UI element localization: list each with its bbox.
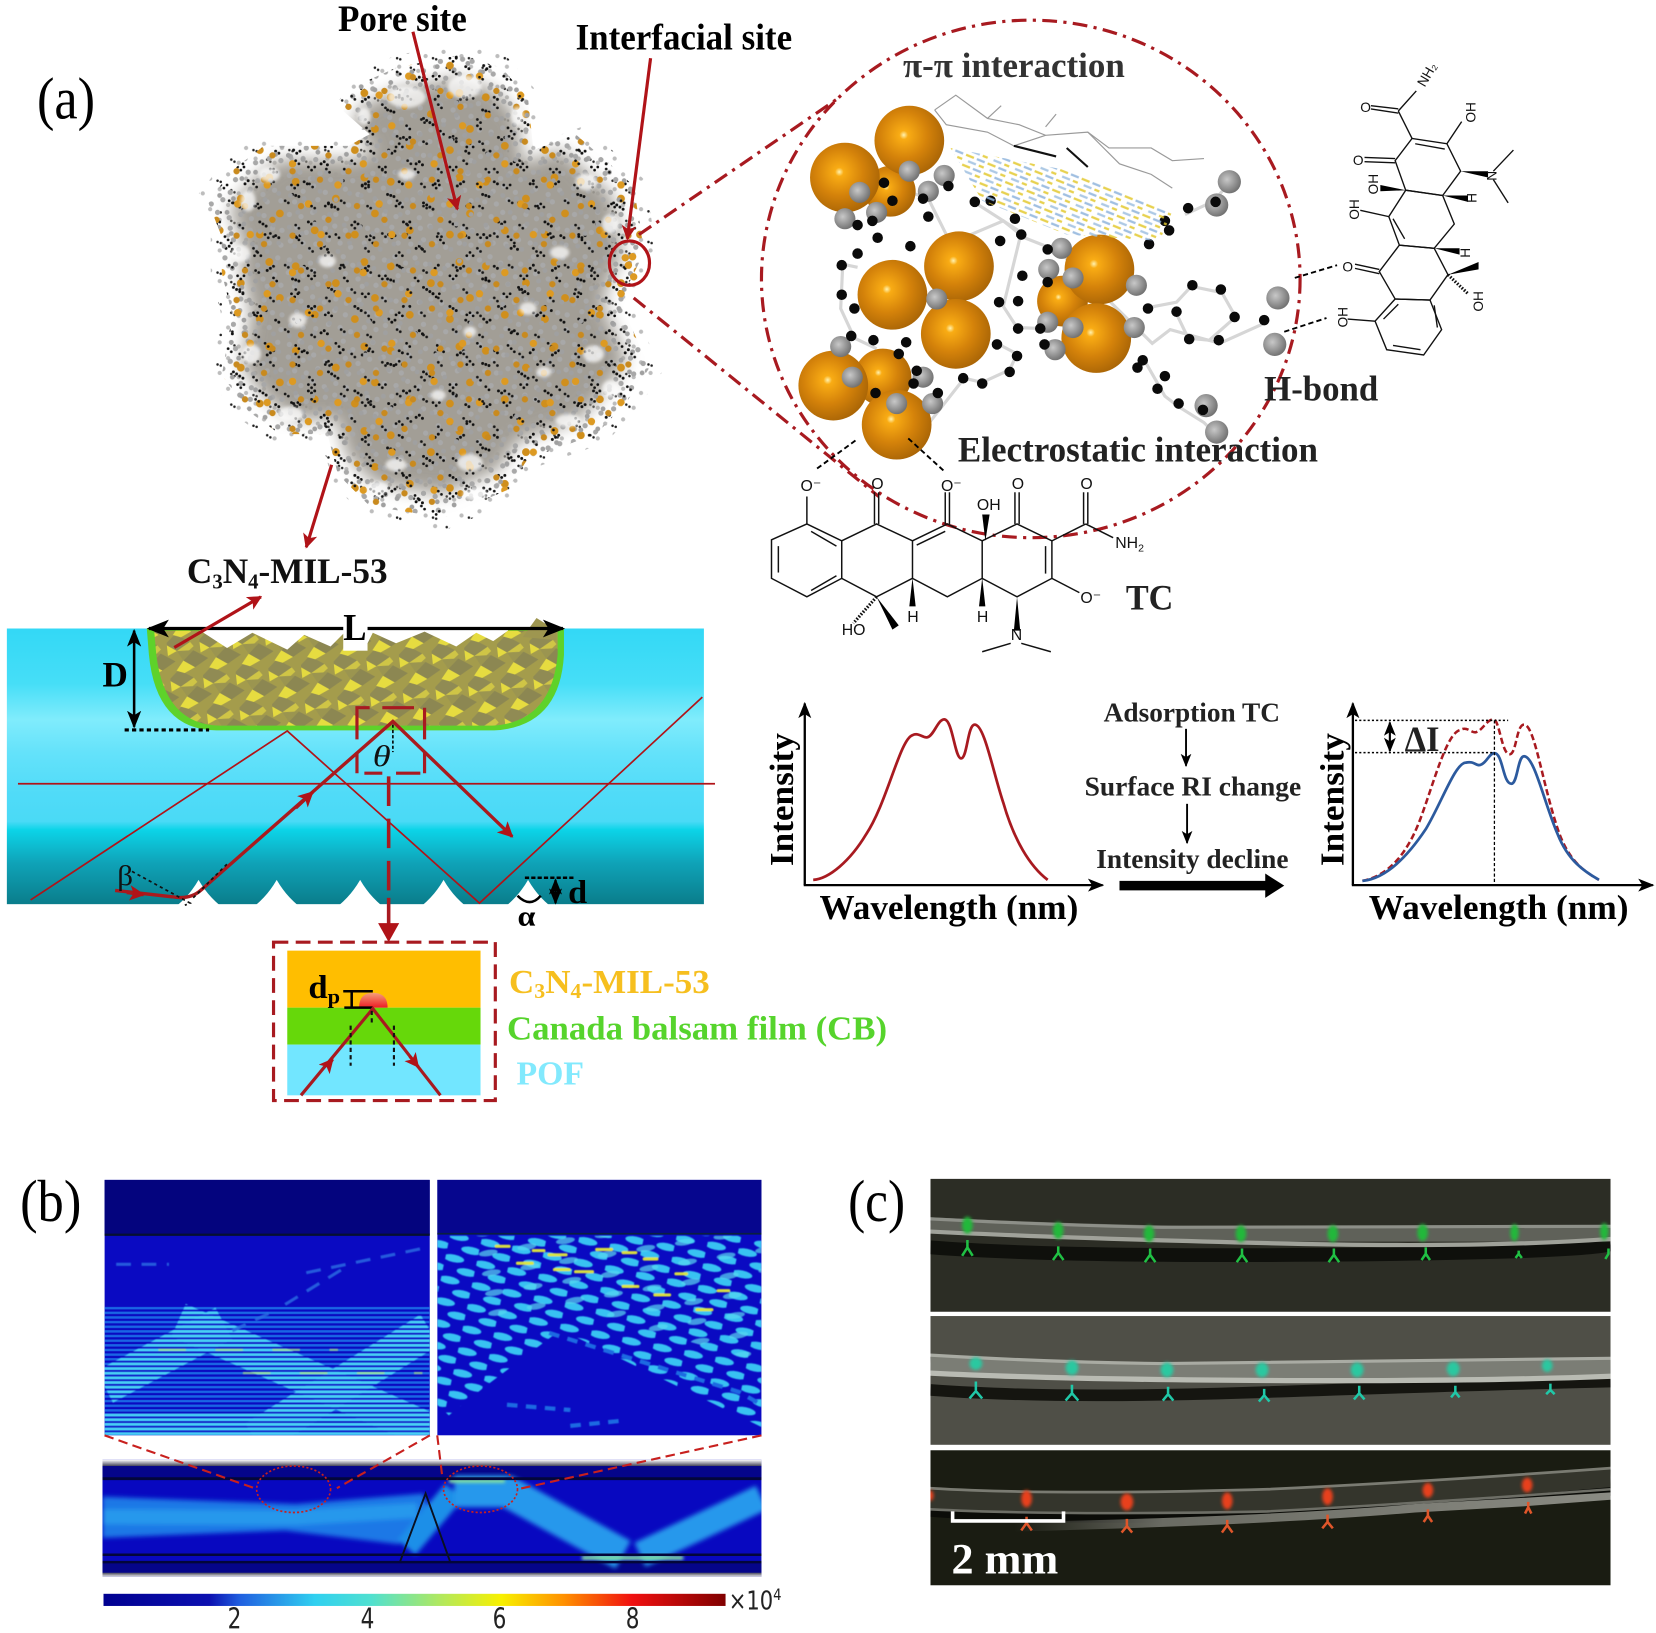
alpha and d annotation <box>518 875 587 932</box>
photo: green light fiber <box>930 1179 1611 1312</box>
side-polished notches <box>177 880 549 905</box>
molecule: tetracycline TC bottom: H <box>977 609 988 626</box>
optical fiber side view <box>7 597 715 932</box>
L dimension: L <box>343 607 366 649</box>
field map: whole structure <box>102 1460 761 1577</box>
label C3N4-MIL-53: -MIL-53 <box>259 551 388 591</box>
panel label (c): (c) <box>848 1168 905 1234</box>
molecule: tetracycline TC bottom: O <box>1012 476 1024 493</box>
molecule: tetracycline right: H <box>1458 248 1473 258</box>
spectrum chart: before adsorption <box>764 703 1103 927</box>
heading: interfacial site with arrow and ring <box>576 17 792 285</box>
L dimension <box>149 607 563 651</box>
heading: interfacial site with arrow and ring: Interfacial site <box>576 17 792 58</box>
molecule: tetracycline TC bottom: H <box>907 609 919 626</box>
scale bar 2 mm <box>952 1511 1064 1584</box>
process flow text and arrows <box>1085 697 1301 898</box>
field map: right zoom <box>437 1180 761 1435</box>
color scale bar: 4 <box>773 1585 782 1604</box>
spectrum chart: after adsorption: Wavelength (nm) <box>1369 888 1629 927</box>
panel label (a): (a) <box>37 65 95 131</box>
beta annotation: β <box>117 861 133 892</box>
color scale bar <box>104 1585 782 1633</box>
molecule: tetracycline TC bottom: OH <box>977 497 1001 514</box>
panel label (b): (b) <box>20 1168 81 1234</box>
legend: layer names <box>507 964 887 1093</box>
molecule: tetracycline right <box>1336 60 1513 355</box>
legend: layer names: C <box>509 964 533 1001</box>
inset: evanescent field layers: p <box>328 984 340 1008</box>
molecule: tetracycline TC bottom: O⁻ <box>801 478 821 495</box>
molecule: tetracycline TC bottom: NH <box>1115 535 1138 552</box>
dashed connector arrow to inset <box>378 776 399 942</box>
thick ray with arrowheads <box>115 721 512 898</box>
molecule: tetracycline right: H <box>1464 193 1479 203</box>
molecule: tetracycline TC bottom: HO <box>842 622 865 639</box>
process flow text and arrows: Adsorption TC <box>1104 697 1280 727</box>
molecule: tetracycline TC bottom: O <box>871 476 884 493</box>
molecule: tetracycline TC bottom: O <box>1080 476 1093 493</box>
alpha and d annotation: d <box>568 875 587 911</box>
molecule: tetracycline right: N <box>1485 171 1500 181</box>
molecule: tetracycline right: OH <box>1463 102 1478 123</box>
D dimension <box>102 631 209 730</box>
dashed bonds <box>816 265 1337 471</box>
field map: left zoom <box>105 1180 430 1439</box>
molecule: tetracycline right: O <box>1353 153 1364 168</box>
label C3N4-MIL-53: C <box>187 551 213 591</box>
legend: layer names: POF <box>516 1056 584 1093</box>
D dimension: D <box>102 655 128 695</box>
black carbon atoms <box>842 183 1264 410</box>
magnified MOF structure <box>798 106 1290 460</box>
molecule: tetracycline TC bottom <box>771 476 1144 652</box>
legend: layer names: 3 <box>534 979 545 1003</box>
grey oxygen atoms <box>830 161 1290 444</box>
molecule: tetracycline right: NH₂ <box>1414 60 1440 89</box>
dashed theta box <box>357 708 425 773</box>
alpha and d annotation: α <box>518 901 536 932</box>
spectrum chart: before adsorption: Intensity <box>764 733 801 866</box>
molecule: tetracycline TC bottom: N <box>1011 627 1022 644</box>
heading: H-bond: H-bond <box>1264 368 1378 408</box>
molecule: tetracycline right: OH <box>1347 199 1362 220</box>
spectrum chart: after adsorption <box>1314 703 1653 927</box>
legend: layer names: 4 <box>571 979 582 1003</box>
process flow text and arrows: Intensity decline <box>1096 844 1288 874</box>
molecule: tetracycline TC bottom: O⁻ <box>1080 590 1101 607</box>
MOF nanoparticle cluster <box>198 50 662 529</box>
label C3N4-MIL-53: 4 <box>248 569 259 593</box>
molecule: tetracycline TC bottom: 2 <box>1138 542 1144 554</box>
label C3N4-MIL-53: 3 <box>212 569 223 593</box>
zoom connectors and dotted circles <box>105 1435 761 1512</box>
inset: evanescent field layers: d <box>308 970 327 1006</box>
zoom guide lines and magnified circle <box>634 20 1300 538</box>
color scale bar: ×10 <box>729 1586 782 1616</box>
legend: layer names: Canada balsam film (CB) <box>507 1010 887 1047</box>
red leader arrow to label <box>174 597 261 648</box>
heading: pi-pi interaction: π-π interaction <box>903 46 1125 85</box>
dashed theta box: θ <box>373 741 391 773</box>
legend: layer names: -MIL-53 <box>581 964 710 1001</box>
molecule: tetracycline right: OH <box>1471 291 1486 312</box>
photo: red light fiber <box>927 1450 1611 1585</box>
label TC: TC <box>1126 578 1173 618</box>
label C3N4-MIL-53: N <box>223 551 248 591</box>
process flow text and arrows: Surface RI change <box>1085 771 1301 801</box>
spectrum chart: after adsorption: ΔI <box>1405 719 1439 759</box>
spectrum chart: after adsorption: Intensity <box>1314 733 1351 866</box>
scale bar 2 mm: 2 mm <box>952 1536 1058 1584</box>
orange metal spheres <box>798 106 1134 460</box>
molecule: tetracycline right: O <box>1360 100 1371 115</box>
thin light rays <box>18 697 715 903</box>
molecule: tetracycline TC bottom: O⁻ <box>941 478 962 495</box>
spectrum chart: before adsorption: Wavelength (nm) <box>820 888 1078 927</box>
groove with coating <box>147 618 564 730</box>
molecule: tetracycline right: O <box>1342 260 1353 275</box>
photo: cyan light fiber <box>930 1316 1611 1445</box>
legend: layer names: N <box>545 964 571 1001</box>
pi-pi stacked C3N4 sheet <box>935 95 1204 241</box>
heading: electrostatic interaction: Electrostatic interaction <box>958 430 1318 470</box>
beta annotation <box>117 861 227 905</box>
molecule: tetracycline right: OH <box>1366 174 1381 194</box>
leader arrow from cluster to label <box>306 465 332 547</box>
inset: evanescent field layers <box>274 942 495 1101</box>
molecule: tetracycline right: OH <box>1336 307 1351 328</box>
heading: pore site with arrow <box>338 0 467 209</box>
